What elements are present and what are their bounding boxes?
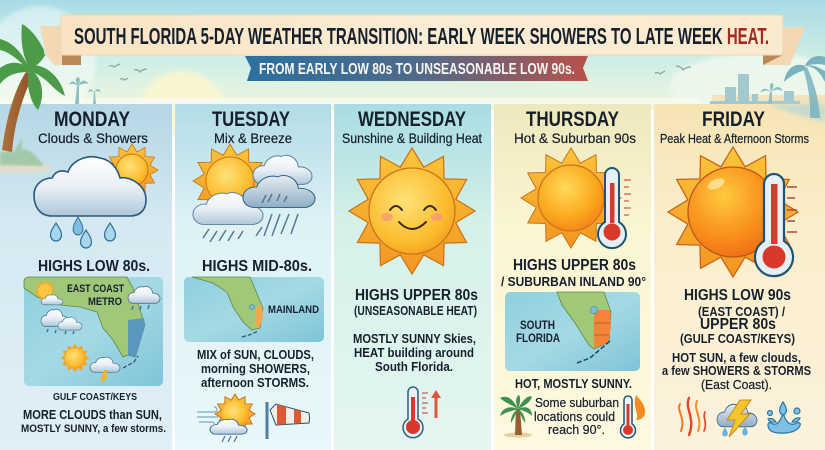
description: Tuesday: morning SHOWERS, bbox=[201, 361, 310, 376]
panel heading: Thursday: Hot & Suburban 90s bbox=[514, 130, 636, 146]
description: Tuesday: MIX of SUN, CLOUDS, bbox=[197, 347, 314, 362]
temperature: Thursday bbox=[501, 257, 646, 289]
map: Monday Florida bbox=[24, 277, 163, 386]
icon: thermometer with rising arrow bbox=[403, 387, 441, 438]
temperature: Wednesday: HIGHS UPPER 80s bbox=[355, 287, 478, 304]
map: Thursday South Florida: FLORIDA bbox=[516, 331, 560, 345]
panel heading: Friday bbox=[660, 108, 809, 146]
icon: sun with thermometer bbox=[521, 148, 631, 248]
small palm in skyline bbox=[760, 83, 783, 106]
panel heading: Monday: Clouds & Showers bbox=[38, 130, 148, 146]
subtitle ribbon: FROM EARLY LOW 80s TO UNSEASONABLE LOW 90s. bbox=[259, 61, 575, 78]
temperature: Wednesday: (UNSEASONABLE HEAT) bbox=[354, 304, 477, 318]
panel heading: Thursday bbox=[514, 108, 636, 146]
description: Monday: MORE CLOUDS than SUN, bbox=[23, 407, 162, 422]
panel heading: Tuesday bbox=[212, 108, 292, 146]
icon: thermometer and flame bbox=[620, 395, 645, 438]
panel heading: Monday bbox=[38, 108, 148, 146]
palm tree right bbox=[784, 56, 825, 118]
description: Wednesday bbox=[353, 331, 476, 374]
panel heading: Thursday: THURSDAY bbox=[526, 108, 619, 131]
description: Friday bbox=[662, 350, 811, 392]
description: Friday: HOT SUN, a few clouds, bbox=[672, 350, 801, 365]
panel heading: Tuesday: TUESDAY bbox=[212, 108, 290, 131]
panel: Wednesday bbox=[334, 104, 491, 450]
icon: palm tree bbox=[500, 395, 532, 438]
description: Tuesday bbox=[197, 347, 314, 390]
icon: windsock bbox=[266, 402, 310, 439]
note: suburban locations bbox=[534, 395, 619, 437]
temperature: Friday: UPPER 80s bbox=[700, 316, 776, 333]
icon: storm cloud with lightning bbox=[717, 400, 757, 437]
map label: Gulf Coast/Keys: GULF COAST/KEYS bbox=[53, 391, 137, 403]
background sky and beach scene bbox=[0, 0, 825, 137]
map: Thursday South Florida bbox=[505, 292, 640, 371]
description: Wednesday: South Florida. bbox=[375, 359, 453, 374]
temperature: Thursday: / SUBURBAN INLAND 90° bbox=[501, 274, 646, 289]
temperature: Thursday: HIGHS UPPER 80s bbox=[513, 257, 636, 274]
distant palms left bbox=[69, 77, 101, 104]
title ribbon bbox=[40, 15, 805, 65]
note: suburban locations: reach 90°. bbox=[548, 422, 605, 437]
panel: Tuesday bbox=[175, 104, 331, 450]
temperature: Monday: HIGHS LOW 80s. bbox=[38, 258, 150, 275]
icon: water splash bbox=[768, 402, 800, 433]
description: Monday bbox=[21, 407, 166, 435]
map: Tuesday Florida bbox=[184, 277, 324, 342]
note: suburban locations: locations could bbox=[534, 409, 615, 424]
palm tree left bbox=[0, 24, 65, 173]
description: Friday: (East Coast). bbox=[701, 377, 772, 392]
description: Wednesday: HEAT building around bbox=[354, 345, 474, 360]
temperature: Friday bbox=[680, 287, 795, 346]
birds bbox=[109, 64, 691, 80]
panel heading: Friday: FRIDAY bbox=[702, 108, 765, 131]
map: Tuesday Florida: MAINLAND bbox=[268, 304, 319, 316]
icon: peak sun with thermometer bbox=[668, 147, 798, 277]
icon: smiling sun bbox=[349, 148, 475, 274]
skyline bbox=[710, 74, 800, 107]
panel heading: Wednesday: Sunshine & Building Heat bbox=[342, 130, 482, 146]
panel: Monday bbox=[0, 104, 172, 450]
temperature: Wednesday bbox=[354, 287, 478, 318]
panel heading: Wednesday bbox=[342, 108, 482, 146]
description: Tuesday: afternoon STORMS. bbox=[201, 375, 309, 390]
panel heading: Monday: MONDAY bbox=[54, 108, 130, 131]
icon: breezy sun and cloud bbox=[197, 394, 255, 442]
note: suburban locations: Some suburban bbox=[535, 395, 619, 410]
panel: Friday bbox=[654, 104, 825, 450]
icon: sun with clouds and rain bbox=[193, 144, 315, 242]
description: Monday: MOSTLY SUNNY, a few storms. bbox=[21, 423, 166, 435]
panel heading: Wednesday: WEDNESDAY bbox=[358, 108, 466, 131]
map: Thursday South Florida: SOUTH bbox=[520, 318, 555, 332]
subtitle ribbon bbox=[245, 56, 588, 81]
temperature: Tuesday: HIGHS MID-80s. bbox=[202, 258, 312, 275]
temperature: Friday: (EAST COAST) / bbox=[698, 304, 785, 319]
temperature: Friday: (GULF COAST/KEYS) bbox=[680, 331, 795, 346]
description: Thursday: HOT, MOSTLY SUNNY. bbox=[515, 376, 632, 391]
icon: heat waves bbox=[679, 398, 705, 435]
panel heading: Tuesday: Mix & Breeze bbox=[214, 130, 292, 146]
icon: sun behind cloud with rain bbox=[34, 144, 158, 248]
panel: Thursday bbox=[494, 104, 651, 450]
description: Wednesday: MOSTLY SUNNY Skies, bbox=[353, 331, 476, 346]
map: Monday Florida: METRO bbox=[88, 296, 122, 308]
temperature: Friday: HIGHS LOW 90s bbox=[684, 287, 791, 304]
map: Monday Florida: EAST COAST bbox=[67, 283, 124, 295]
